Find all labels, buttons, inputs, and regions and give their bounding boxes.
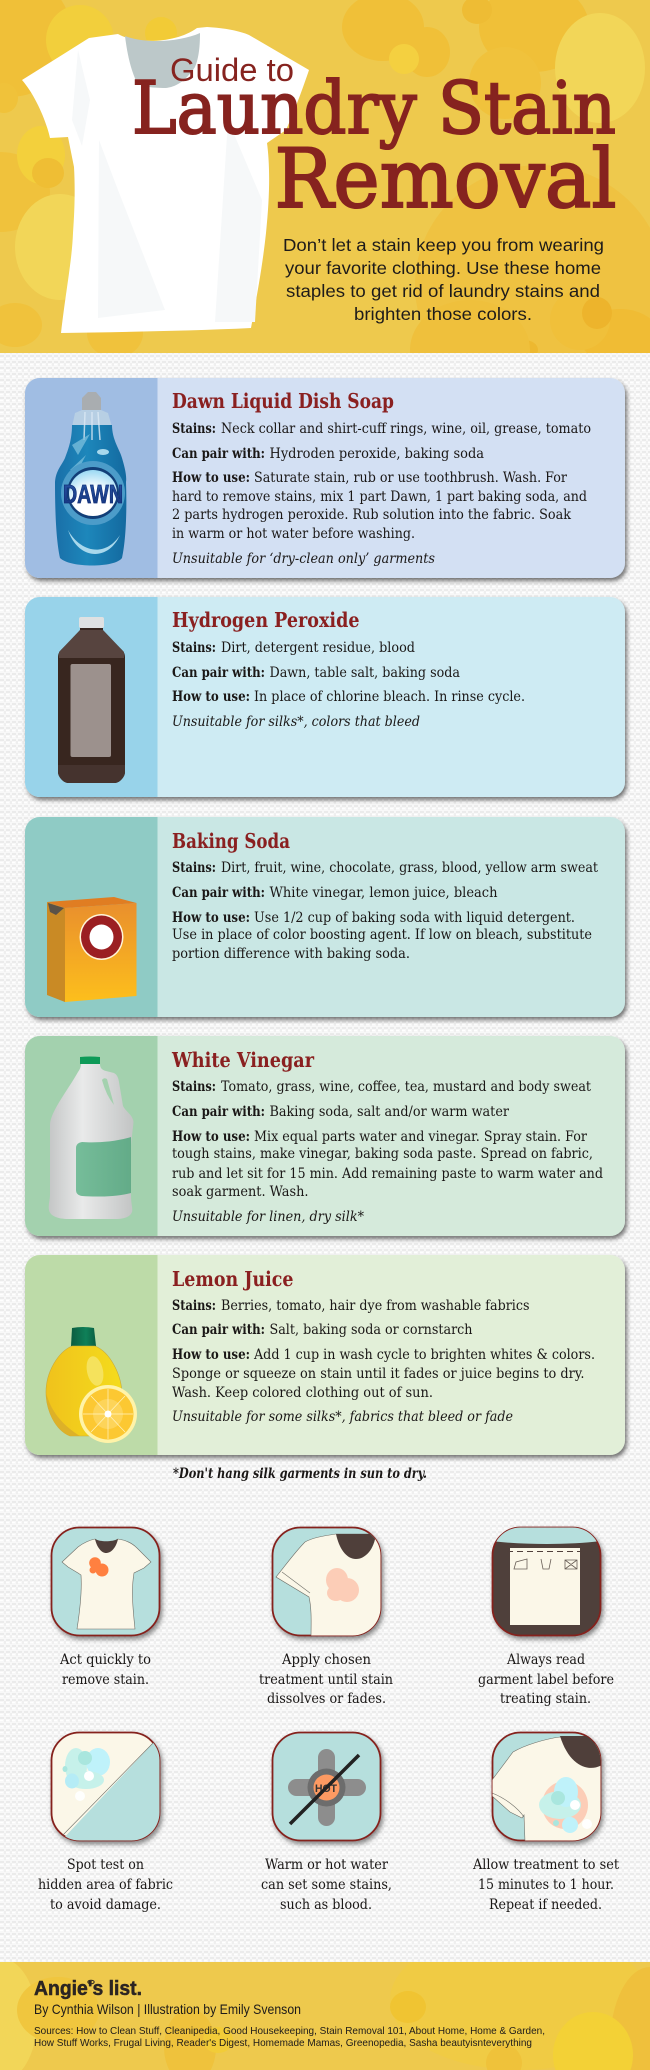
- card text: Dawn: How to use:: [172, 470, 250, 486]
- card text: White vinegar: White Vinegar: [171, 1048, 315, 1072]
- card text: Baking soda: Can pair with:: [172, 885, 265, 901]
- icon: baking soda box: [47, 897, 136, 1002]
- card text: Lemon juice: Sponge or squeeze on stain until it fades or juice begins to dry.: [172, 1366, 584, 1382]
- icon: fabric spot test: [52, 1732, 161, 1842]
- card text: Hydrogen peroxide: Unsuitable for silks*, colors that bleed: [172, 714, 420, 730]
- card text: Dawn: Saturate stain, rub or use toothbrush. Wash. For: [254, 470, 567, 486]
- card text: Hydrogen peroxide: In place of chlorine bleach. In rinse cycle.: [254, 689, 525, 705]
- card text: Lemon juice: Lemon Juice: [172, 1267, 294, 1291]
- card text: Dawn: Neck collar and shirt-cuff rings, wine, oil, grease, tomato: [221, 421, 591, 437]
- icon: Dawn bottle: DAWN: [63, 479, 123, 509]
- card text: Baking soda: White vinegar, lemon juice, bleach: [270, 885, 498, 901]
- sources: [34, 2025, 545, 2049]
- caption: Act quickly to: [59, 1652, 151, 1668]
- panel: White vinegar: [25, 1036, 625, 1236]
- card text: Hydrogen peroxide: How to use:: [172, 689, 250, 705]
- card text: White vinegar: soak garment. Wash.: [172, 1184, 308, 1200]
- footer banner: [0, 1962, 650, 2070]
- card text: Hydrogen peroxide: [172, 608, 525, 730]
- sources: Sources: How to Clean Stuff, Cleanipedia, Good Housekeeping, Stain Removal 101, About Home, Home & Garden,: [34, 2025, 545, 2037]
- caption: Warm or hot water: [265, 1857, 388, 1873]
- card text: White vinegar: Mix equal parts water and vinegar. Spray stain. For: [254, 1129, 587, 1145]
- icon: shirt with fading stain: [272, 1528, 382, 1637]
- card text: Lemon juice: Can pair with:: [172, 1322, 265, 1338]
- card text: White vinegar: [171, 1048, 603, 1225]
- logo: Angie's list: Angie's list.: [34, 1978, 142, 2000]
- icon: shirt with treated stain: [492, 1732, 602, 1842]
- caption: treatment until stain: [259, 1672, 393, 1688]
- tip: apply treatment: [259, 1528, 393, 1707]
- title: Guide to: [170, 52, 294, 88]
- card text: Baking soda: Dirt, fruit, wine, chocolate, grass, blood, yellow arm sweat: [221, 860, 598, 876]
- header banner: [0, 0, 650, 353]
- caption: garment label before: [478, 1672, 614, 1688]
- card text: Dawn: [172, 389, 591, 567]
- card text: Hydrogen peroxide: Hydrogen Peroxide: [172, 608, 360, 632]
- byline: By Cynthia Wilson | Illustration by Emily Svenson: [34, 2001, 301, 2017]
- caption: Always read: [506, 1652, 585, 1668]
- card text: Lemon juice: Salt, baking soda or cornstarch: [270, 1322, 473, 1338]
- card text: Hydrogen peroxide: Can pair with:: [172, 665, 265, 681]
- icon: vinegar jug: [49, 1056, 134, 1219]
- caption: Allow treatment to set: [472, 1857, 619, 1873]
- caption: 15 minutes to 1 hour.: [478, 1877, 614, 1893]
- card text: Dawn: Dawn Liquid Dish Soap: [172, 389, 394, 413]
- card text: Dawn: Can pair with:: [172, 446, 265, 462]
- card text: Lemon juice: Berries, tomato, hair dye from washable fabrics: [221, 1298, 530, 1314]
- icon: peroxide bottle: [58, 617, 125, 783]
- sources: How Stuff Works, Frugal Living, Reader's Digest, Homemade Mamas, Greenopedia, Sasha beautyisnteverything: [34, 2037, 532, 2049]
- card text: Hydrogen peroxide: Stains:: [172, 640, 216, 656]
- card text: Lemon juice: Unsuitable for some silks*, fabrics that bleed or fade: [172, 1409, 513, 1425]
- card text: Lemon juice: Wash. Keep colored clothing out of sun.: [172, 1385, 433, 1401]
- card text: Lemon juice: [172, 1267, 595, 1425]
- card text: Dawn: Hydroden peroxide, baking soda: [270, 446, 484, 462]
- tip: read garment label: [478, 1525, 614, 1707]
- tip: act quickly: [52, 1528, 160, 1688]
- caption: [59, 1652, 151, 1688]
- card text: Hydrogen peroxide: Dawn, table salt, baking soda: [270, 665, 460, 681]
- caption: [261, 1857, 392, 1913]
- card text: Lemon juice: Add 1 cup in wash cycle to brighten whites & colors.: [253, 1347, 595, 1363]
- title: Removal: [274, 133, 616, 227]
- card text: White vinegar: Tomato, grass, wine, coffee, tea, mustard and body sweat: [221, 1079, 591, 1095]
- card text: White vinegar: Unsuitable for linen, dry silk*: [172, 1209, 364, 1225]
- caption: such as blood.: [280, 1897, 372, 1913]
- panel: Hydrogen peroxide: [25, 597, 625, 797]
- caption: [478, 1652, 614, 1707]
- card text: Baking soda: Baking Soda: [172, 829, 290, 853]
- card text: Dawn: Unsuitable for ‘dry-clean only’ garments: [172, 551, 435, 567]
- tip: avoid hot water: [261, 1732, 392, 1913]
- card text: White vinegar: tough stains, make vinegar, baking soda paste. Spread on fabric,: [172, 1146, 593, 1162]
- title: [132, 52, 616, 227]
- intro text: Don’t let a stain keep you from wearing: [283, 235, 604, 255]
- icon: Dawn bottle: [55, 392, 126, 566]
- card text: White vinegar: Can pair with:: [172, 1104, 265, 1120]
- card text: Dawn: Stains:: [172, 421, 216, 437]
- card text: White vinegar: Baking soda, salt and/or warm water: [270, 1104, 509, 1120]
- intro text: [283, 235, 604, 324]
- caption: hidden area of fabric: [38, 1877, 173, 1893]
- icon: crossed-out hot tap: HOT: [315, 1783, 337, 1795]
- card text: Baking soda: Use in place of color boosting agent. If low on bleach, substitute: [172, 927, 592, 943]
- illustration: white t-shirt: [22, 27, 309, 333]
- intro text: brighten those colors.: [354, 304, 532, 324]
- caption: Spot test on: [67, 1857, 144, 1873]
- caption: can set some stains,: [261, 1877, 392, 1893]
- card text: Dawn: 2 parts hydrogen peroxide. Rub solution into the fabric. Soak: [172, 507, 572, 523]
- card text: White vinegar: Stains:: [172, 1079, 216, 1095]
- card text: Lemon juice: Stains:: [172, 1298, 216, 1314]
- card text: Baking soda: [172, 829, 598, 962]
- card text: Baking soda: portion difference with baking soda.: [172, 946, 410, 962]
- caption: treating stain.: [500, 1691, 591, 1707]
- caption: Repeat if needed.: [489, 1897, 602, 1913]
- caption: [38, 1857, 173, 1913]
- card text: White vinegar: How to use:: [172, 1129, 250, 1145]
- card text: Hydrogen peroxide: Dirt, detergent residue, blood: [221, 640, 415, 656]
- card text: Baking soda: Use 1/2 cup of baking soda with liquid detergent.: [254, 910, 575, 926]
- tip: spot test: [38, 1732, 173, 1913]
- caption: [259, 1652, 393, 1707]
- card text: Baking soda: How to use:: [172, 910, 250, 926]
- card text: White vinegar: rub and let sit for 15 min. Add remaining paste to warm water and: [172, 1166, 603, 1182]
- card text: Dawn: in warm or hot water before washing.: [172, 526, 415, 542]
- icon: crossed-out hot tap: [272, 1732, 380, 1840]
- intro text: your favorite clothing. Use these home: [285, 258, 601, 278]
- panel: Baking soda: [25, 817, 625, 1017]
- icon: garment care label: [490, 1525, 602, 1636]
- caption: Apply chosen: [281, 1652, 371, 1668]
- caption: dissolves or fades.: [267, 1691, 386, 1707]
- card text: Dawn: hard to remove stains, mix 1 part Dawn, 1 part baking soda, and: [172, 489, 587, 505]
- tip: allow treatment to set: [472, 1732, 619, 1913]
- footnote: *Don't hang silk garments in sun to dry.: [173, 1466, 427, 1482]
- title: Laundry Stain: [132, 66, 616, 150]
- caption: remove stain.: [62, 1672, 149, 1688]
- icon: lemon bottle and slice: [46, 1327, 137, 1443]
- panel: Dawn liquid dish soap: [25, 378, 625, 578]
- caption: to avoid damage.: [50, 1897, 161, 1913]
- card text: Baking soda: Stains:: [172, 860, 216, 876]
- intro text: staples to get rid of laundry stains and: [286, 281, 600, 301]
- panel: Lemon juice: [25, 1255, 625, 1455]
- caption: [472, 1857, 619, 1913]
- card text: Lemon juice: How to use:: [172, 1347, 250, 1363]
- icon: shirt with fresh stain: [52, 1528, 160, 1636]
